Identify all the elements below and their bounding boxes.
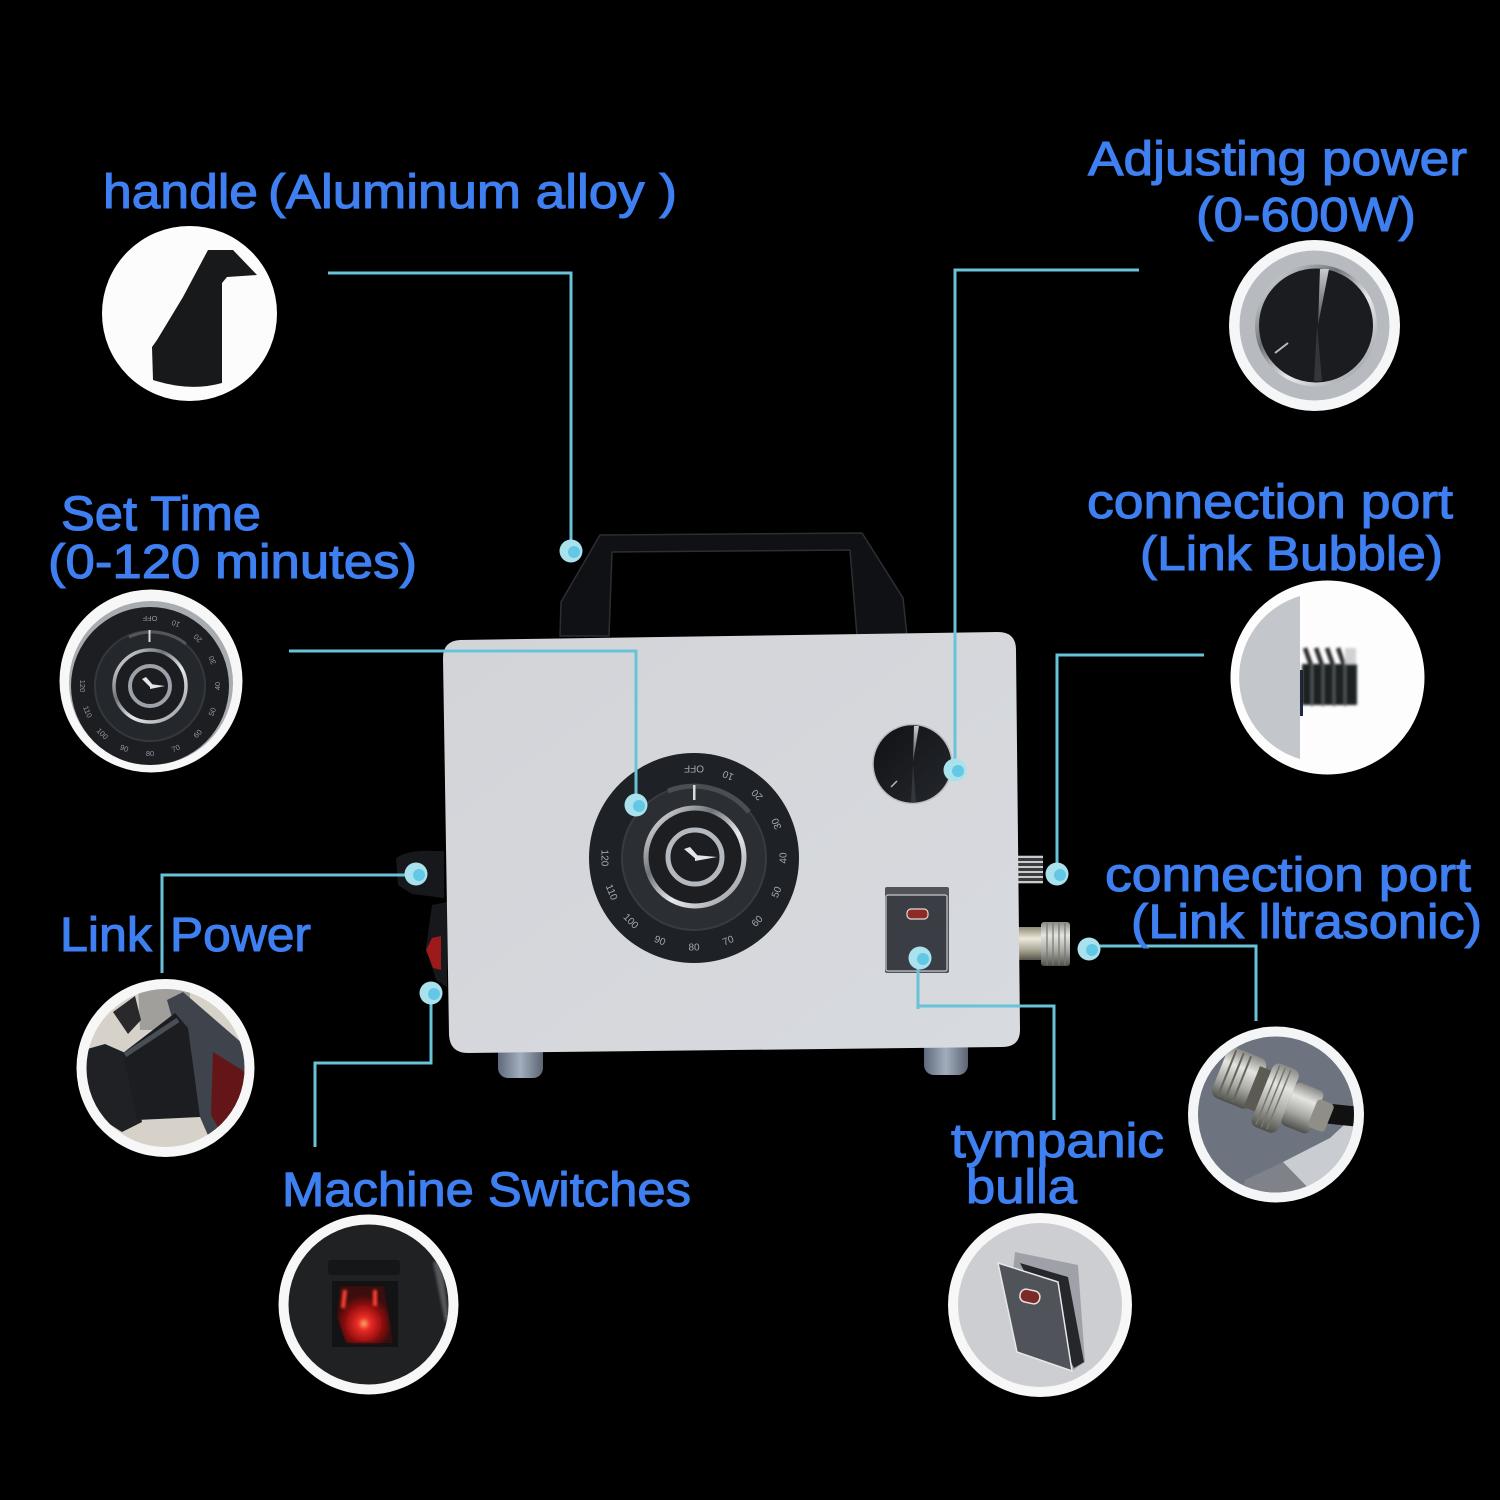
handle [560, 533, 907, 636]
icon: ultrasonic port detail [1188, 1026, 1364, 1202]
timer labels: 50 [207, 706, 218, 717]
dial labels: 50 [770, 885, 785, 900]
heading: tympanic bulla: tympanic [951, 1115, 1164, 1168]
timer labels: 30 [207, 655, 218, 666]
switch plate [885, 887, 949, 973]
heading: machine switches: Machine Switches [282, 1164, 691, 1217]
timer dial [589, 753, 799, 963]
timer labels: 120 [78, 680, 87, 692]
heading: link power: Link [60, 909, 153, 962]
timer labels: 20 [192, 632, 204, 644]
icon: link power detail [76, 979, 254, 1157]
leader line: adjusting power [955, 270, 1139, 770]
heading: set time: Set Time [61, 488, 261, 541]
icon: timer detail [60, 590, 242, 772]
timer labels: 90 [119, 743, 130, 754]
heading: connection port bubble: (Link Bubble) [1140, 528, 1443, 581]
rocker switch [426, 902, 447, 987]
timer labels: OFF [142, 614, 158, 623]
dial labels: 120 [598, 850, 610, 867]
icon: machine switch detail [278, 1214, 458, 1394]
icon: bubble port detail [1230, 580, 1424, 774]
heading: connection port ultrasonic: (Link lltrasonic) [1131, 896, 1482, 949]
timer labels: 60 [192, 728, 204, 740]
heading: adjusting power: Adjusting power [1088, 133, 1467, 186]
leader line: link bubble [1057, 655, 1204, 874]
heading: connection port bubble: connection port [1087, 476, 1453, 529]
leader line: machine switches [315, 993, 431, 1147]
heading: connection port ultrasonic: connection port [1105, 849, 1471, 902]
dial labels: 80 [688, 942, 700, 954]
timer labels: 70 [170, 743, 181, 754]
leader line: handle [328, 273, 571, 551]
timer labels [78, 614, 222, 758]
leader line: set time [289, 651, 636, 805]
leader line: link ultrasonic [1089, 946, 1256, 1021]
dial labels: 90 [652, 934, 667, 949]
leader line: link power [162, 875, 416, 973]
heading: tympanic bulla: bulla [966, 1161, 1077, 1214]
dial labels: 110 [603, 883, 619, 902]
dial labels [598, 762, 790, 954]
heading: set time: (0-120 minutes) [48, 536, 417, 589]
dial labels: 70 [721, 934, 736, 948]
machine illustration [396, 533, 1070, 1078]
timer labels: 100 [95, 726, 110, 741]
leader line: tympanic bulla [918, 958, 1054, 1120]
heading: link power: Power [170, 909, 311, 962]
power knob [873, 724, 952, 804]
dial labels: 40 [778, 852, 790, 864]
dial labels: 60 [750, 914, 766, 929]
dial labels: 20 [750, 786, 765, 802]
dial labels: 10 [721, 767, 736, 782]
heading: handle: (Aluminum alloy ) [268, 166, 677, 219]
heading: handle: handle [103, 166, 258, 219]
connector: bubble port [1017, 855, 1043, 884]
dial labels: 30 [770, 816, 784, 831]
heading: adjusting power: (0-600W) [1196, 189, 1416, 242]
dial labels: 100 [621, 912, 640, 932]
connector: ultrasonic port [1017, 922, 1070, 966]
panel [443, 632, 1020, 1053]
feet [498, 1036, 968, 1078]
timer labels: 10 [170, 618, 181, 629]
icon: tympanic bulla detail [948, 1213, 1132, 1397]
timer labels: 40 [213, 682, 222, 690]
power plug [396, 851, 444, 898]
icon: power knob detail [1229, 240, 1400, 411]
dial labels: OFF [684, 762, 704, 774]
timer labels: 110 [81, 705, 94, 719]
marker dots [404, 540, 1100, 1004]
timer labels: 80 [146, 749, 154, 758]
icon: handle detail [102, 226, 277, 401]
